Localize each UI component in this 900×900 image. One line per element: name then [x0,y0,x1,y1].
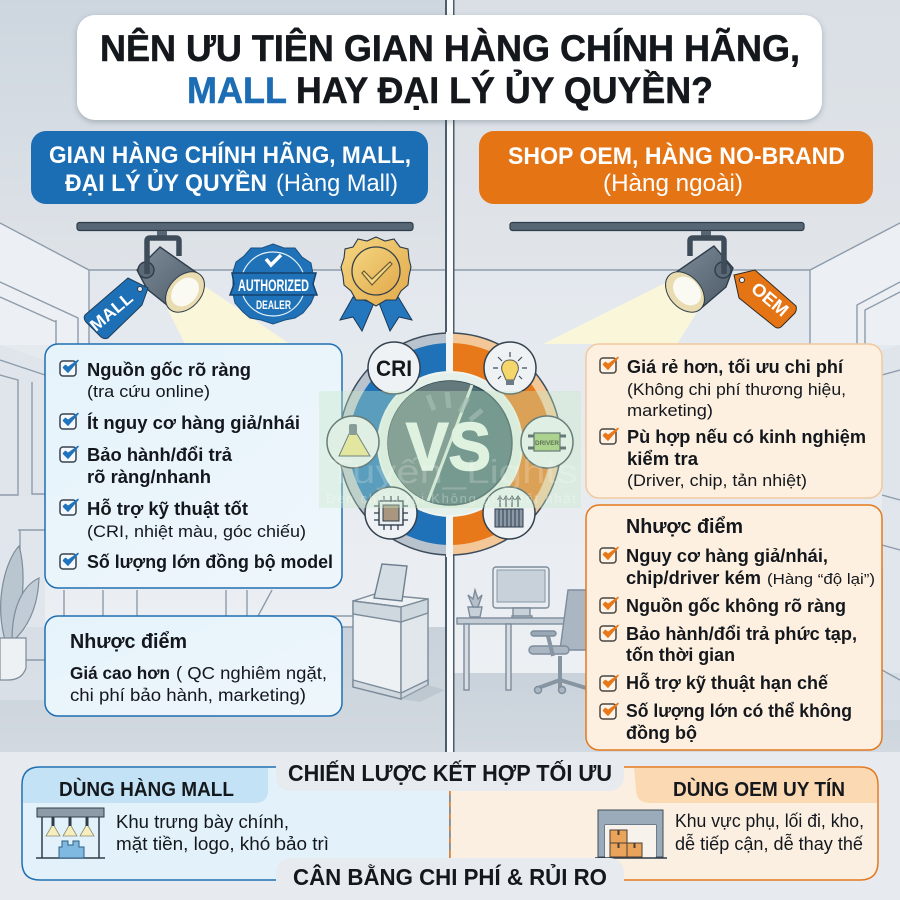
title: MALL [187,70,287,111]
panel: mall advantages: Hỗ trợ kỹ thuật tốt [87,498,248,519]
header: official stores: GIAN HÀNG CHÍNH HÃNG, MALL, [49,141,411,169]
desk, monitor and chair [457,567,882,694]
panel: mall drawbacks: ( QC nghiêm ngặt, [176,663,327,683]
kiosk [353,564,445,702]
panel: OEM drawbacks: Nguy cơ hàng giả/nhái, [626,545,828,566]
panel: OEM advantages: Giá rẻ hơn, tối ưu chi phí [627,356,844,377]
medal [340,237,412,331]
panel: OEM advantages [586,344,882,498]
panel: use mall [22,767,450,880]
panel: mall advantages: Số lượng lớn đồng bộ model [87,551,333,572]
tag: oem: OEM [747,278,792,321]
watermark [319,391,581,508]
panel: OEM drawbacks: tốn thời gian [626,644,735,665]
icon: driver: DRIVER [535,440,559,447]
spotlight: oem [510,222,804,328]
header: OEM shops: (Hàng ngoài) [603,170,743,197]
panel: OEM advantages: (Không chi phí thương hiệu, [627,380,846,399]
title: HAY ĐẠI LÝ ỦY QUYỀN? [296,69,713,111]
tag: mall: MALL [86,288,137,335]
badge: authorized dealer: AUTHORIZED [238,277,309,295]
panel: mall drawbacks: Nhược điểm [70,630,187,653]
title: NÊN ƯU TIÊN GIAN HÀNG CHÍNH HÃNG, [100,27,800,69]
centre divider [445,0,454,752]
watermark: Đèn chiếu rọi Không gian tốt nhất [326,491,576,506]
panel: mall advantages: (CRI, nhiệt màu, góc chiếu) [87,522,306,541]
panel: OEM drawbacks: (Hàng “độ lại”) [767,571,875,588]
panel: OEM advantages: Pù hợp nếu có kinh nghiệm [627,426,866,447]
icon: downlight [327,416,379,468]
header: official stores: ĐẠI LÝ ỦY QUYỀN [65,168,267,197]
header: official stores [31,131,428,204]
panel: mall advantages: rõ ràng/nhanh [87,466,211,487]
panel: mall drawbacks [45,616,342,716]
heading: balance cost and risk [276,858,624,900]
panel: OEM drawbacks: chip/driver kém [626,567,761,588]
panel: use reputable OEM: DÙNG OEM UY TÍN [673,777,845,801]
panel: mall advantages: Bảo hành/đổi trả [87,444,233,465]
light beam left [168,285,290,344]
heading: optimal combination [276,752,624,791]
panel: use mall: DÙNG HÀNG MALL [59,777,234,801]
panel: OEM drawbacks: đồng bộ [626,722,697,743]
icon: CRI [368,342,420,394]
panel: use reputable OEM [450,767,878,880]
icon: display lights [36,808,105,858]
plant left [0,546,39,680]
badge: authorized dealer [230,244,317,324]
watermark: Tuyến_Lights [328,453,578,490]
tag: mall [84,278,148,339]
panel: OEM drawbacks: Bảo hành/đổi trả phức tạp, [626,623,857,644]
badge: authorized dealer: DEALER [256,298,291,312]
icon: driver [521,416,573,468]
panel: mall advantages [45,344,342,588]
panel: OEM advantages: kiểm tra [627,448,699,469]
tag: oem [734,270,796,328]
panel: mall drawbacks: chi phí bảo hành, marketing) [70,685,306,705]
header: OEM shops [479,131,873,204]
icon: chip [365,487,417,539]
bottom strategy band [0,752,900,900]
title [77,15,822,120]
header: official stores: (Hàng Mall) [276,170,398,197]
panel: OEM advantages: (Driver, chip, tản nhiệt) [627,471,807,490]
icon: CRI: CRI [376,356,412,381]
light beam right [543,282,697,344]
panel: mall advantages: Nguồn gốc rõ ràng [87,359,251,380]
icon: warehouse [595,810,667,858]
panel: mall advantages: Ít nguy cơ hàng giả/nhái [87,412,300,433]
panel: OEM drawbacks: Nguồn gốc không rõ ràng [626,595,846,616]
spotlight: mall [77,222,413,339]
panel: use mall: mặt tiền, logo, khó bảo trì [116,833,329,854]
VS circle [327,332,573,557]
header: OEM shops: SHOP OEM, HÀNG NO-BRAND [508,142,845,170]
panel: OEM drawbacks: Hỗ trợ kỹ thuật hạn chế [626,672,829,693]
icon: bulb [484,342,536,394]
panel: mall drawbacks: Giá cao hơn [70,663,170,683]
panel: OEM drawbacks: Số lượng lớn có thể không [626,700,852,721]
VS circle: VS [406,409,491,485]
panel: OEM advantages: marketing) [627,401,713,420]
icon: heat sink [483,487,535,539]
panel: OEM drawbacks [586,505,882,750]
panel: use mall: Khu trưng bày chính, [116,811,289,832]
panel: mall advantages: (tra cứu online) [87,382,210,401]
heading: balance cost and risk: CÂN BẰNG CHI PHÍ & RỦI RO [293,862,607,890]
heading: optimal combination: CHIẾN LƯỢC KẾT HỢP TỐI ƯU [288,759,612,786]
panel: use reputable OEM: Khu vực phụ, lối đi, kho, [675,810,864,831]
panel: OEM drawbacks: Nhược điểm [626,515,743,538]
panel: use reputable OEM: dễ tiếp cận, dễ thay thế [675,833,864,854]
